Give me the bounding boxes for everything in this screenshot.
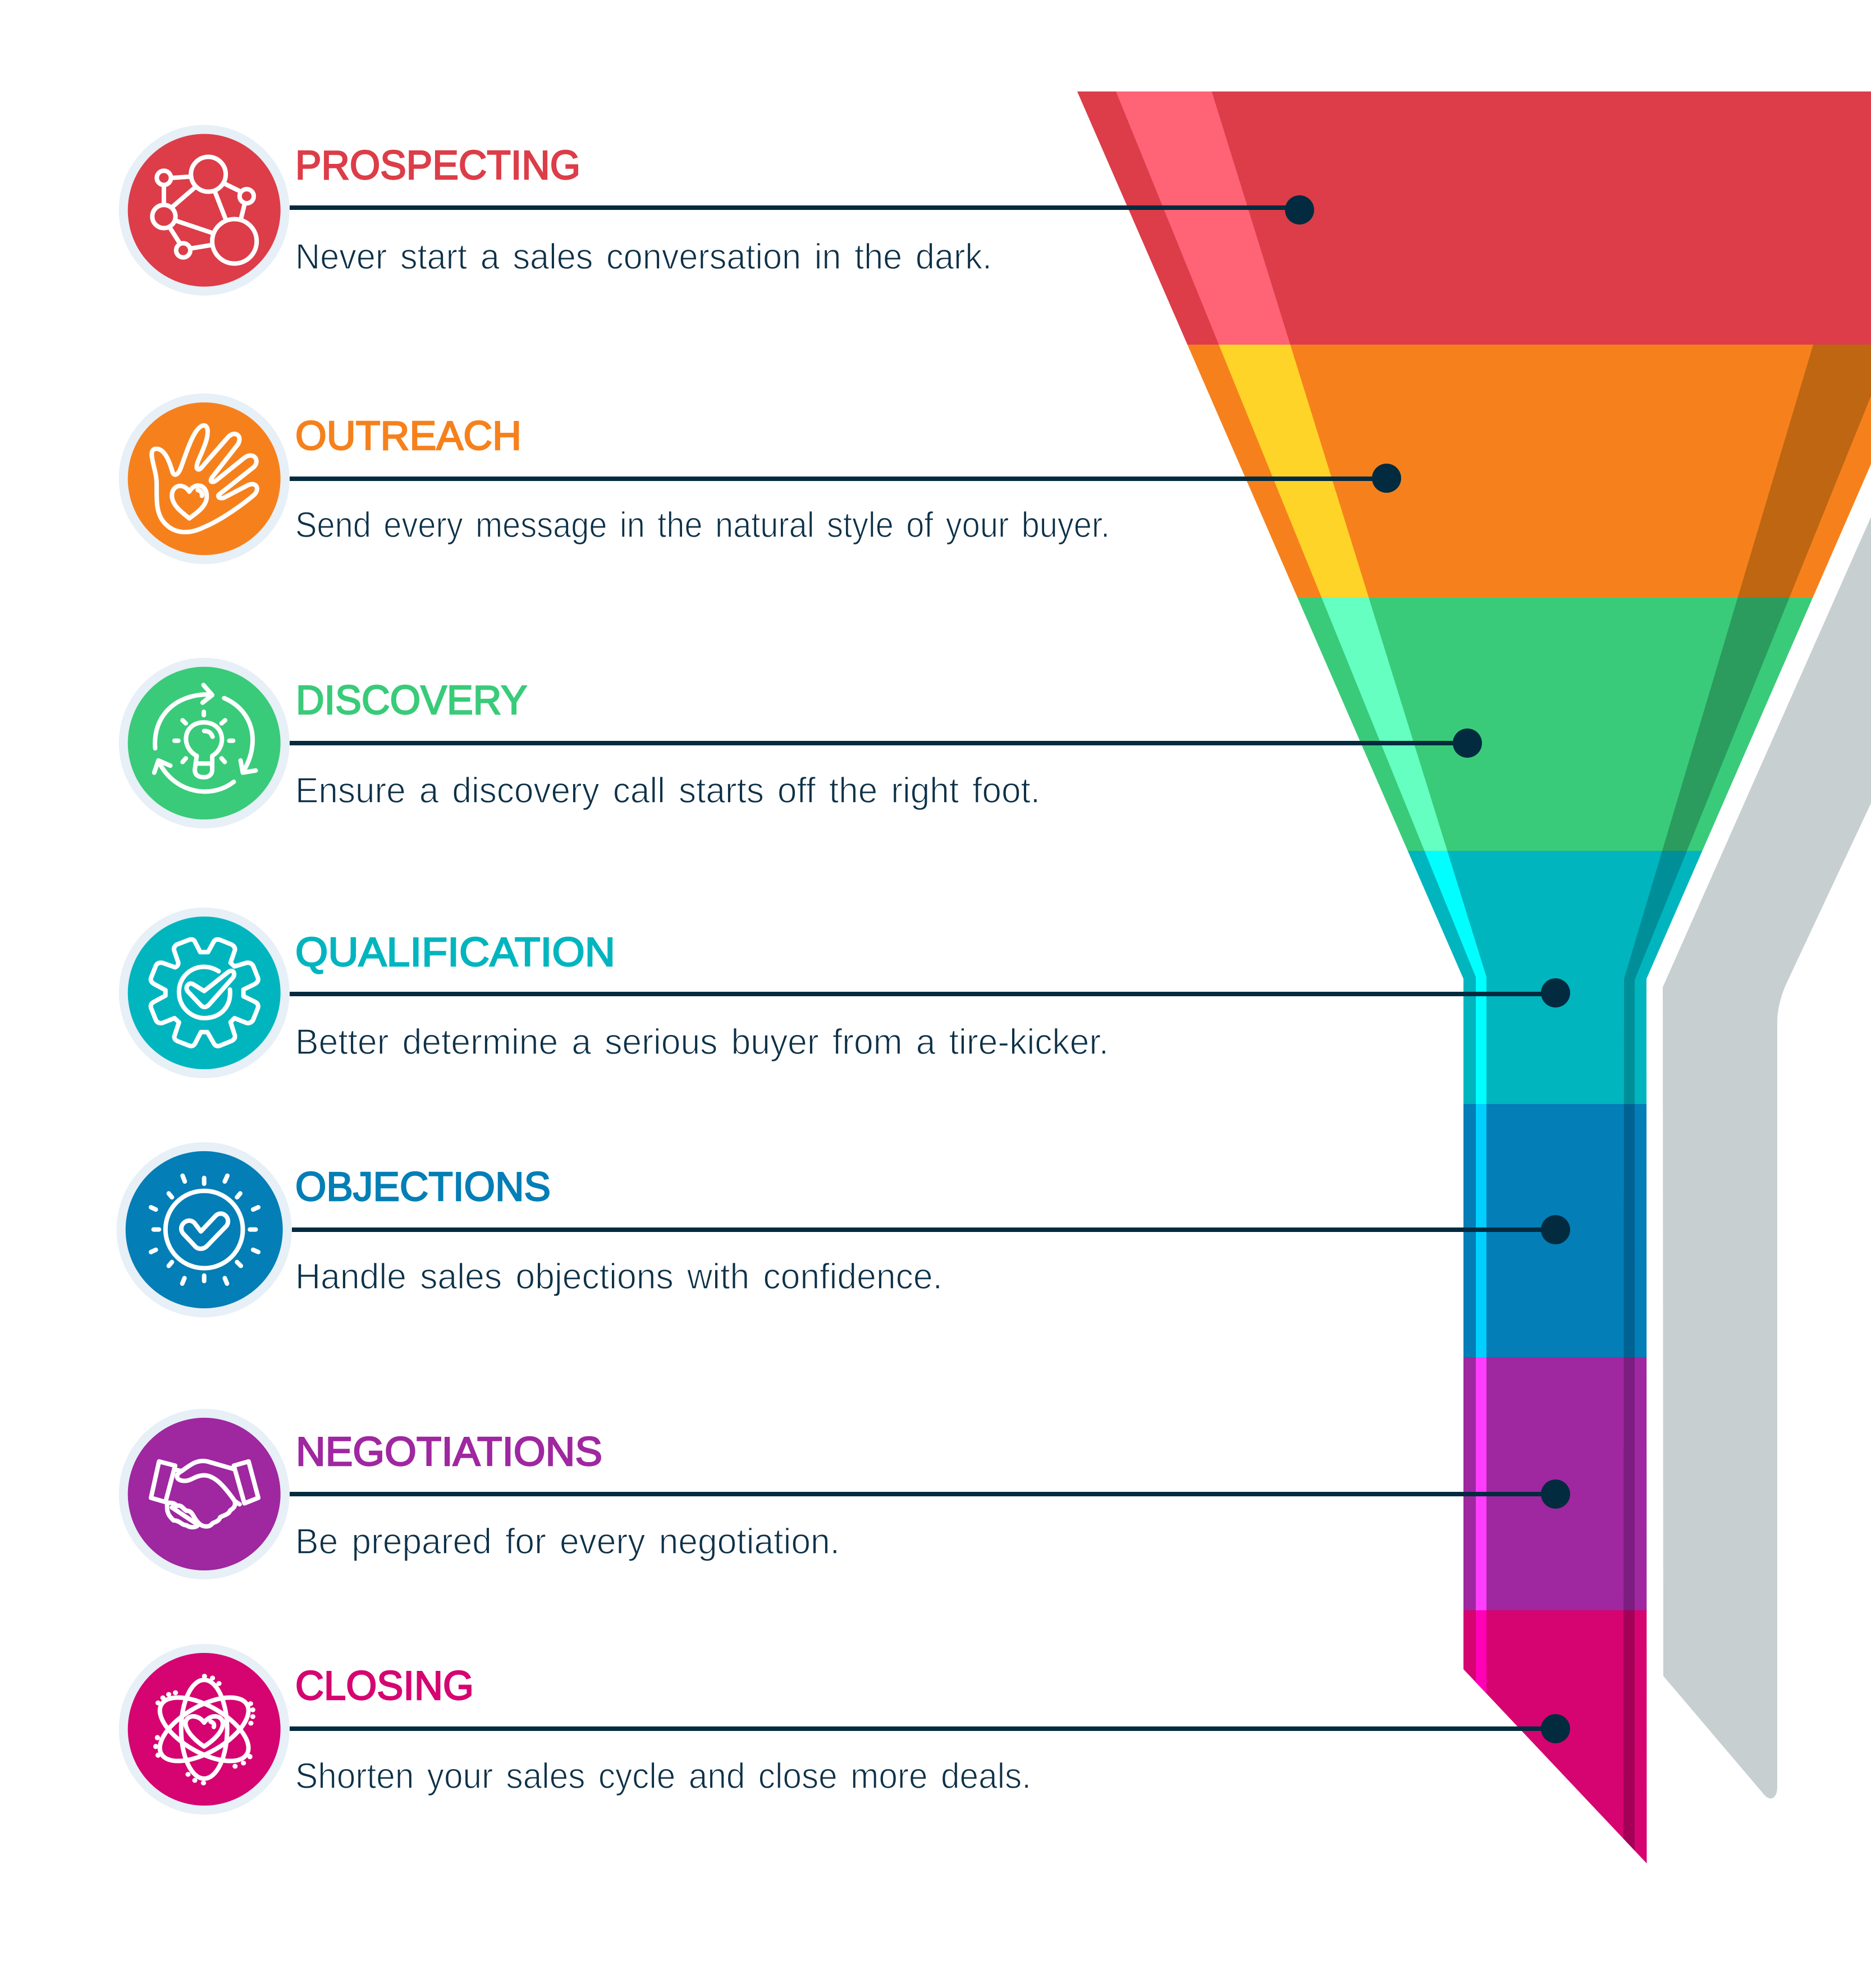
funnel shadow shape bbox=[1663, 517, 1871, 1798]
description: Never start a sales conversation in the dark. bbox=[295, 236, 992, 277]
connector line and dot bbox=[292, 1215, 1570, 1244]
funnel band: outreach bbox=[1187, 345, 1871, 598]
row: discovery bbox=[119, 658, 1482, 828]
heading: PROSPECTING bbox=[295, 143, 580, 188]
icon badge: gear with check bbox=[119, 908, 290, 1078]
row: prospecting bbox=[119, 125, 1314, 296]
connector line and dot bbox=[290, 464, 1401, 493]
heading: QUALIFICATION bbox=[295, 930, 615, 975]
description: Shorten your sales cycle and close more deals. bbox=[295, 1756, 1031, 1796]
connector line and dot bbox=[290, 1714, 1570, 1743]
connector line and dot bbox=[290, 1479, 1570, 1509]
row: negotiations bbox=[119, 1409, 1570, 1579]
heading: DISCOVERY bbox=[296, 678, 527, 723]
description: Better determine a serious buyer from a tire-kicker. bbox=[295, 1022, 1109, 1062]
heading: CLOSING bbox=[295, 1664, 474, 1708]
description: Be prepared for every negotiation. bbox=[295, 1521, 840, 1561]
funnel bbox=[1067, 91, 1871, 1875]
connector line and dot bbox=[290, 729, 1482, 758]
description: Ensure a discovery call starts off the right foot. bbox=[295, 770, 1040, 810]
heading: OBJECTIONS bbox=[295, 1165, 551, 1210]
icon badge: atom with heart bbox=[119, 1644, 290, 1815]
funnel band: discovery bbox=[1298, 598, 1813, 851]
row: qualification bbox=[119, 908, 1570, 1078]
description: Handle sales objections with confidence. bbox=[295, 1256, 943, 1297]
funnel band: qualification bbox=[1408, 851, 1702, 1104]
heading: NEGOTIATIONS bbox=[296, 1430, 602, 1474]
row: closing bbox=[119, 1644, 1570, 1815]
icon badge: handshake bbox=[119, 1409, 290, 1579]
icon badge: prospecting network bbox=[119, 125, 290, 296]
row: objections bbox=[117, 1142, 1570, 1317]
funnel band: negotiations bbox=[1463, 1357, 1647, 1610]
icon badge: lightbulb cycle bbox=[119, 658, 290, 828]
funnel band: objections bbox=[1463, 1104, 1647, 1357]
funnel band: closing bbox=[1463, 1610, 1647, 1863]
heading: OUTREACH bbox=[295, 414, 521, 459]
description: Send every message in the natural style of your buyer. bbox=[295, 505, 1110, 545]
funnel band: prospecting bbox=[1077, 91, 1871, 345]
connector line and dot bbox=[290, 978, 1570, 1007]
connector line and dot bbox=[290, 195, 1314, 225]
icon badge: hand with heart bbox=[119, 393, 290, 564]
row: outreach bbox=[119, 393, 1401, 564]
icon badge: check with rays bbox=[117, 1142, 292, 1317]
